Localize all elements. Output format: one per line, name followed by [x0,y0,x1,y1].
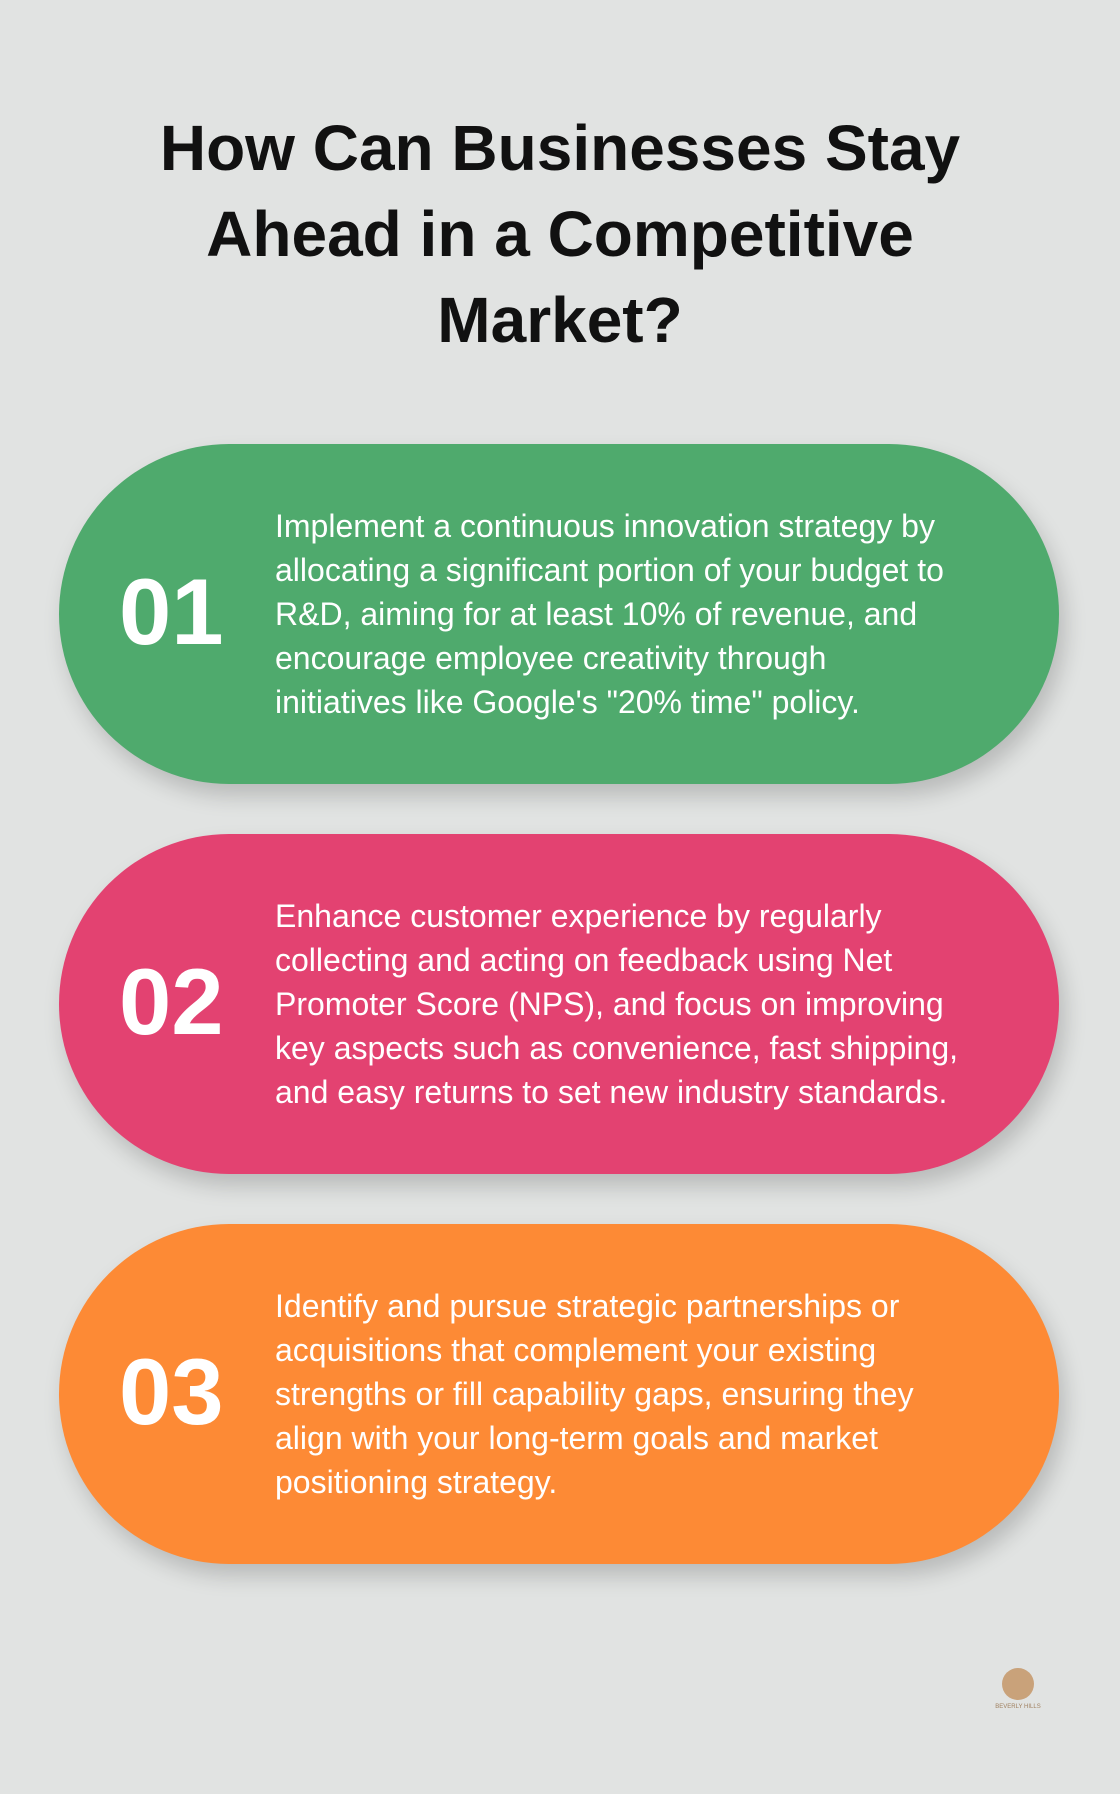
text 03: positioning strategy. [275,1464,557,1500]
text 03: Identify and pursue strategic partnerships or [275,1288,899,1324]
number 03: 03 [119,1339,224,1444]
number 01: 01 [119,559,224,664]
text 02: and easy returns to set new industry standards. [275,1074,947,1110]
panel: step 01 [59,444,1059,784]
text 03: acquisitions that complement your existing [275,1332,876,1368]
logo [995,1668,1041,1710]
text 03: align with your long-term goals and market [275,1420,878,1456]
title: Ahead in a Competitive [206,198,914,270]
logo: BEVERLY HILLS [995,1704,1041,1710]
text 02: Promoter Score (NPS), and focus on improving [275,986,944,1022]
text 01: allocating a significant portion of your budget to [275,552,944,588]
text 02: key aspects such as convenience, fast shipping, [275,1030,958,1066]
text 01: initiatives like Google's "20% time" policy. [275,684,860,720]
text 03 [275,1288,914,1500]
text 03: strengths or fill capability gaps, ensuring they [275,1376,914,1412]
title: Market? [437,284,683,356]
text 02 [275,898,958,1110]
text 01: Implement a continuous innovation strategy by [275,508,935,544]
text 01 [275,508,944,720]
text 01: R&D, aiming for at least 10% of revenue, and [275,596,917,632]
number 02: 02 [119,949,224,1054]
title [160,112,960,356]
text 02: collecting and acting on feedback using Net [275,942,892,978]
panel: step 02 [59,834,1059,1174]
text 01: encourage employee creativity through [275,640,826,676]
title: How Can Businesses Stay [160,112,960,184]
panel: step 03 [59,1224,1059,1564]
text 02: Enhance customer experience by regularly [275,898,882,934]
